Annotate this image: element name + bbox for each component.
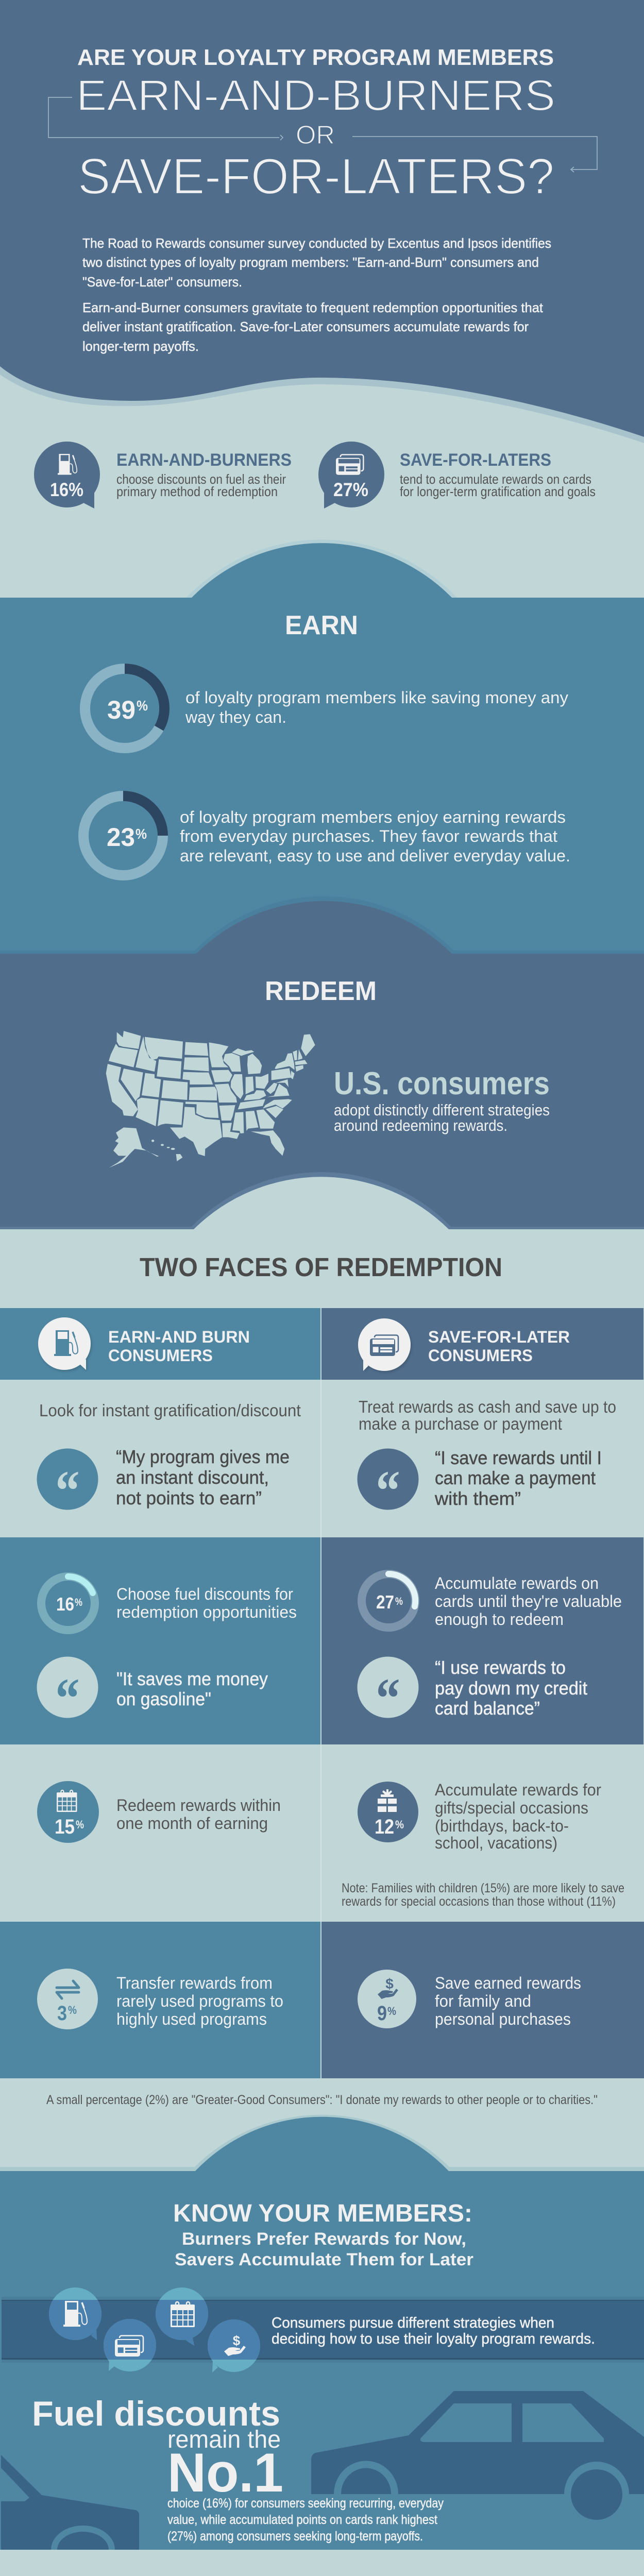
quote: saves me money: “	[56, 1667, 79, 1730]
quote: pay down credit card: “	[376, 1667, 400, 1730]
text: redeem within one month	[116, 1796, 281, 1833]
text: save earned rewards: Save earned rewards	[435, 1974, 581, 1992]
intro text: longer-term payoffs.	[82, 338, 199, 354]
text: save-for-laters: tend to accumulate rewards on cards	[400, 471, 591, 487]
text: treat rewards as cash: make a purchase or payment	[359, 1414, 562, 1433]
icon: fuel bubble 16%: 16%	[50, 479, 83, 500]
title: ARE YOUR LOYALTY PROGRAM MEMBERS	[77, 45, 554, 70]
intro text	[82, 235, 551, 354]
band: consumer strategies	[2, 2287, 644, 2372]
text: save earned rewards: personal purchases	[435, 2010, 571, 2028]
donut chart 39%: 39	[107, 696, 135, 724]
header: earn-and-burn consumers	[38, 1317, 250, 1370]
illustration: car left	[1, 2455, 139, 2550]
title	[76, 45, 555, 205]
icon: hand with dollar 9%: 9	[377, 2002, 387, 2025]
note: families with children	[342, 1881, 624, 1909]
icon: hand with dollar 9%: %	[387, 2005, 396, 2018]
heading: know your members: Burners Prefer Rewards for Now,	[182, 2229, 466, 2249]
donut chart 39%: %	[137, 698, 148, 714]
text: save-for-laters	[400, 450, 596, 499]
text: treat rewards as cash: Treat rewards as cash and save up to	[359, 1397, 616, 1416]
quote: save rewards until: “I save rewards until I	[435, 1447, 602, 1468]
text: consumers pursue strategies: deciding how to use their loyalty program rewards.	[272, 2331, 595, 2347]
icon: transfer arrows 3%	[37, 1969, 98, 2029]
quote: pay down credit card: “I use rewards to	[435, 1657, 566, 1678]
panel: two faces of redemption	[0, 1172, 644, 2107]
text: u.s. consumers	[334, 1066, 550, 1134]
text: earn-and-burners: choose discounts on fuel as their	[116, 471, 286, 487]
quote: save rewards until	[358, 1447, 602, 1522]
donut chart 27%	[362, 1574, 415, 1628]
map: united states	[106, 1031, 315, 1168]
callout: fuel discounts no.1: (27%) among consumers seeking long-term payoffs.	[167, 2529, 423, 2544]
heading: earn: EARN	[285, 611, 358, 640]
panel: earn	[0, 539, 644, 954]
icon: hand with dollar 9%: $	[385, 1976, 394, 1992]
text: transfer rewards	[116, 1974, 283, 2028]
intro text: deliver instant gratification. Save-for-Later consumers accumulate rewards for	[82, 319, 529, 334]
header: save-for-later consumers	[358, 1318, 570, 1371]
text: accumulate rewards on cards	[435, 1574, 622, 1629]
header: save-for-later consumers: SAVE-FOR-LATER	[428, 1328, 570, 1346]
text: look for instant gratification: Look for instant gratification/discount	[39, 1401, 301, 1420]
icon: transfer arrows 3%: 3	[57, 2002, 67, 2025]
text: redeem within one month: one month of earning	[116, 1814, 268, 1833]
panel: know your members	[0, 2115, 644, 2550]
icon: gift 12%: %	[395, 1818, 404, 1831]
text: choose fuel discounts: redemption opportunities	[116, 1603, 297, 1621]
text: earn-and-burners	[116, 450, 292, 499]
text: choose fuel discounts: Choose fuel discounts for	[116, 1585, 293, 1603]
quote: save rewards until: can make a payment	[435, 1467, 596, 1488]
quote: saves me money: on gasoline"	[116, 1688, 211, 1709]
panel: intro header	[0, 0, 644, 464]
title: EARN-AND-BURNERS	[76, 71, 555, 120]
title: OR	[296, 120, 335, 149]
quote: saves me money: "It saves me money	[116, 1668, 268, 1689]
quote: saves me money	[37, 1657, 268, 1730]
callout: fuel discounts no.1	[32, 2394, 444, 2544]
quote: instant discount	[37, 1446, 290, 1522]
text: save-for-laters: SAVE-FOR-LATERS	[400, 450, 551, 470]
intro text: "Save-for-Later" consumers.	[82, 274, 242, 290]
icon: transfer arrows 3%: %	[68, 2004, 77, 2016]
donut chart 23%: 23	[107, 823, 135, 852]
text: choose fuel discounts	[116, 1585, 297, 1621]
callout: fuel discounts no.1: choice (16%) for consumers seeking recurring, everyday	[167, 2496, 444, 2511]
text: 39%: way they can.	[185, 708, 286, 726]
quote: instant discount: an instant discount,	[116, 1467, 269, 1488]
text: accumulate rewards for gifts: gifts/special occasions	[435, 1799, 588, 1817]
callout: fuel discounts no.1: No.1	[167, 2442, 283, 2503]
donut chart 16%: 16	[56, 1594, 74, 1615]
text: accumulate rewards on cards: enough to redeem	[435, 1610, 564, 1629]
donut chart 27%: 27	[376, 1591, 394, 1613]
header: earn-and-burn consumers: CONSUMERS	[108, 1346, 213, 1365]
header: save-for-later consumers: CONSUMERS	[428, 1346, 533, 1365]
donut chart 16%: %	[75, 1597, 82, 1608]
icon: calendar 15%	[37, 1781, 99, 1843]
text: 23%: are relevant, easy to use and deliver everyday value.	[180, 846, 570, 865]
heading: know your members: KNOW YOUR MEMBERS:	[173, 2200, 472, 2227]
text: 23%: from everyday purchases. They favor rewards that	[180, 827, 557, 845]
text: accumulate rewards on cards: Accumulate rewards on	[435, 1574, 599, 1592]
callout: fuel discounts no.1: remain the	[167, 2426, 281, 2453]
callout: fuel discounts no.1: value, while accumulated points on cards rank highest	[167, 2513, 437, 2527]
column backgrounds	[0, 1308, 644, 2078]
text: transfer rewards: highly used programs	[116, 2010, 267, 2028]
header: earn-and-burn consumers: EARN-AND BURN	[108, 1328, 250, 1346]
text: save-for-laters: for longer-term gratification and goals	[400, 484, 596, 499]
quote: pay down credit card: pay down my credit	[435, 1677, 587, 1699]
text: treat rewards as cash	[359, 1397, 616, 1433]
text: consumers pursue strategies	[272, 2315, 595, 2347]
icon bubbles	[49, 2287, 260, 2372]
text: 23%: of loyalty program members enjoy earning rewards	[180, 808, 566, 826]
icon: calendar 15%: %	[76, 1818, 84, 1831]
quote: pay down credit card: card balance”	[435, 1698, 540, 1719]
donut chart 39%	[85, 669, 164, 748]
icon: card bubble 27%: 27%	[333, 479, 368, 500]
text: accumulate rewards on cards: cards until they're valuable	[435, 1592, 622, 1611]
intro text: two distinct types of loyalty program members: "Earn-and-Burn" consumers and	[82, 255, 539, 270]
quote: save rewards until: with them”	[434, 1488, 521, 1509]
heading: redeem: REDEEM	[265, 976, 377, 1006]
text: save earned rewards	[435, 1974, 581, 2028]
donut chart 27%: %	[395, 1596, 403, 1607]
panel: two consumer types	[34, 442, 596, 509]
text: 39%: of loyalty program members like saving money any	[185, 688, 568, 707]
quote: instant discount: “	[56, 1459, 79, 1522]
text: 39%	[185, 688, 568, 726]
text: redeem within one month: Redeem rewards within	[116, 1796, 281, 1815]
icon: gift 12%: 12	[375, 1816, 394, 1838]
donut chart 16%	[41, 1577, 95, 1630]
heading: know your members	[173, 2200, 473, 2269]
icon: fuel bubble 16%	[34, 442, 100, 509]
quote: instant discount: “My program gives me	[116, 1446, 290, 1467]
icon: card bubble 27%	[318, 442, 384, 509]
intro text: The Road to Rewards consumer survey conducted by Excentus and Ipsos identifies	[82, 235, 551, 251]
arrows: bracket connectors	[48, 97, 597, 172]
donut chart 23%	[83, 796, 163, 875]
text: accumulate rewards for gifts: (birthdays, back-to-	[435, 1817, 569, 1835]
icon bubbles: $	[233, 2333, 241, 2348]
text: accumulate rewards for gifts	[435, 1781, 601, 1852]
title: SAVE-FOR-LATERS?	[78, 148, 554, 205]
text: accumulate rewards for gifts: Accumulate rewards for	[435, 1781, 601, 1799]
panel: redeem	[0, 896, 644, 1229]
text: earn-and-burners: primary method of redemption	[116, 484, 278, 499]
icon: calendar 15%: 15	[55, 1816, 75, 1838]
callout: fuel discounts no.1: Fuel discounts	[32, 2394, 280, 2433]
quote: save rewards until: “	[376, 1459, 400, 1522]
text: consumers pursue strategies: Consumers pursue different strategies when	[272, 2315, 554, 2331]
text: u.s. consumers: U.S. consumers	[334, 1066, 550, 1101]
text: u.s. consumers: adopt distinctly different strategies	[334, 1101, 550, 1119]
text: transfer rewards: Transfer rewards from	[116, 1974, 273, 1992]
text: transfer rewards: rarely used programs to	[116, 1992, 283, 2010]
icon: hand with dollar 9%	[358, 1970, 416, 2028]
donut chart 23%: %	[135, 826, 147, 842]
heading: know your members: Savers Accumulate Them for Later	[175, 2250, 473, 2269]
panel: understanding behaviors	[0, 2550, 644, 2576]
text: save earned rewards: for family and	[435, 1992, 531, 2010]
text: earn-and-burners: EARN-AND-BURNERS	[116, 450, 292, 470]
quote: instant discount: not points to earn”	[116, 1487, 262, 1509]
text: u.s. consumers: around redeeming rewards.	[334, 1116, 507, 1134]
intro text: Earn-and-Burner consumers gravitate to frequent redemption opportunities that	[82, 300, 544, 315]
text: 23%	[180, 808, 570, 865]
quote: pay down credit card	[358, 1657, 587, 1730]
illustration: car right	[311, 2391, 644, 2527]
icon: gift 12%	[358, 1782, 418, 1842]
heading: two faces of redemption: TWO FACES OF REDEMPTION	[140, 1252, 502, 1282]
text: accumulate rewards for gifts: school, vacations)	[435, 1834, 557, 1852]
